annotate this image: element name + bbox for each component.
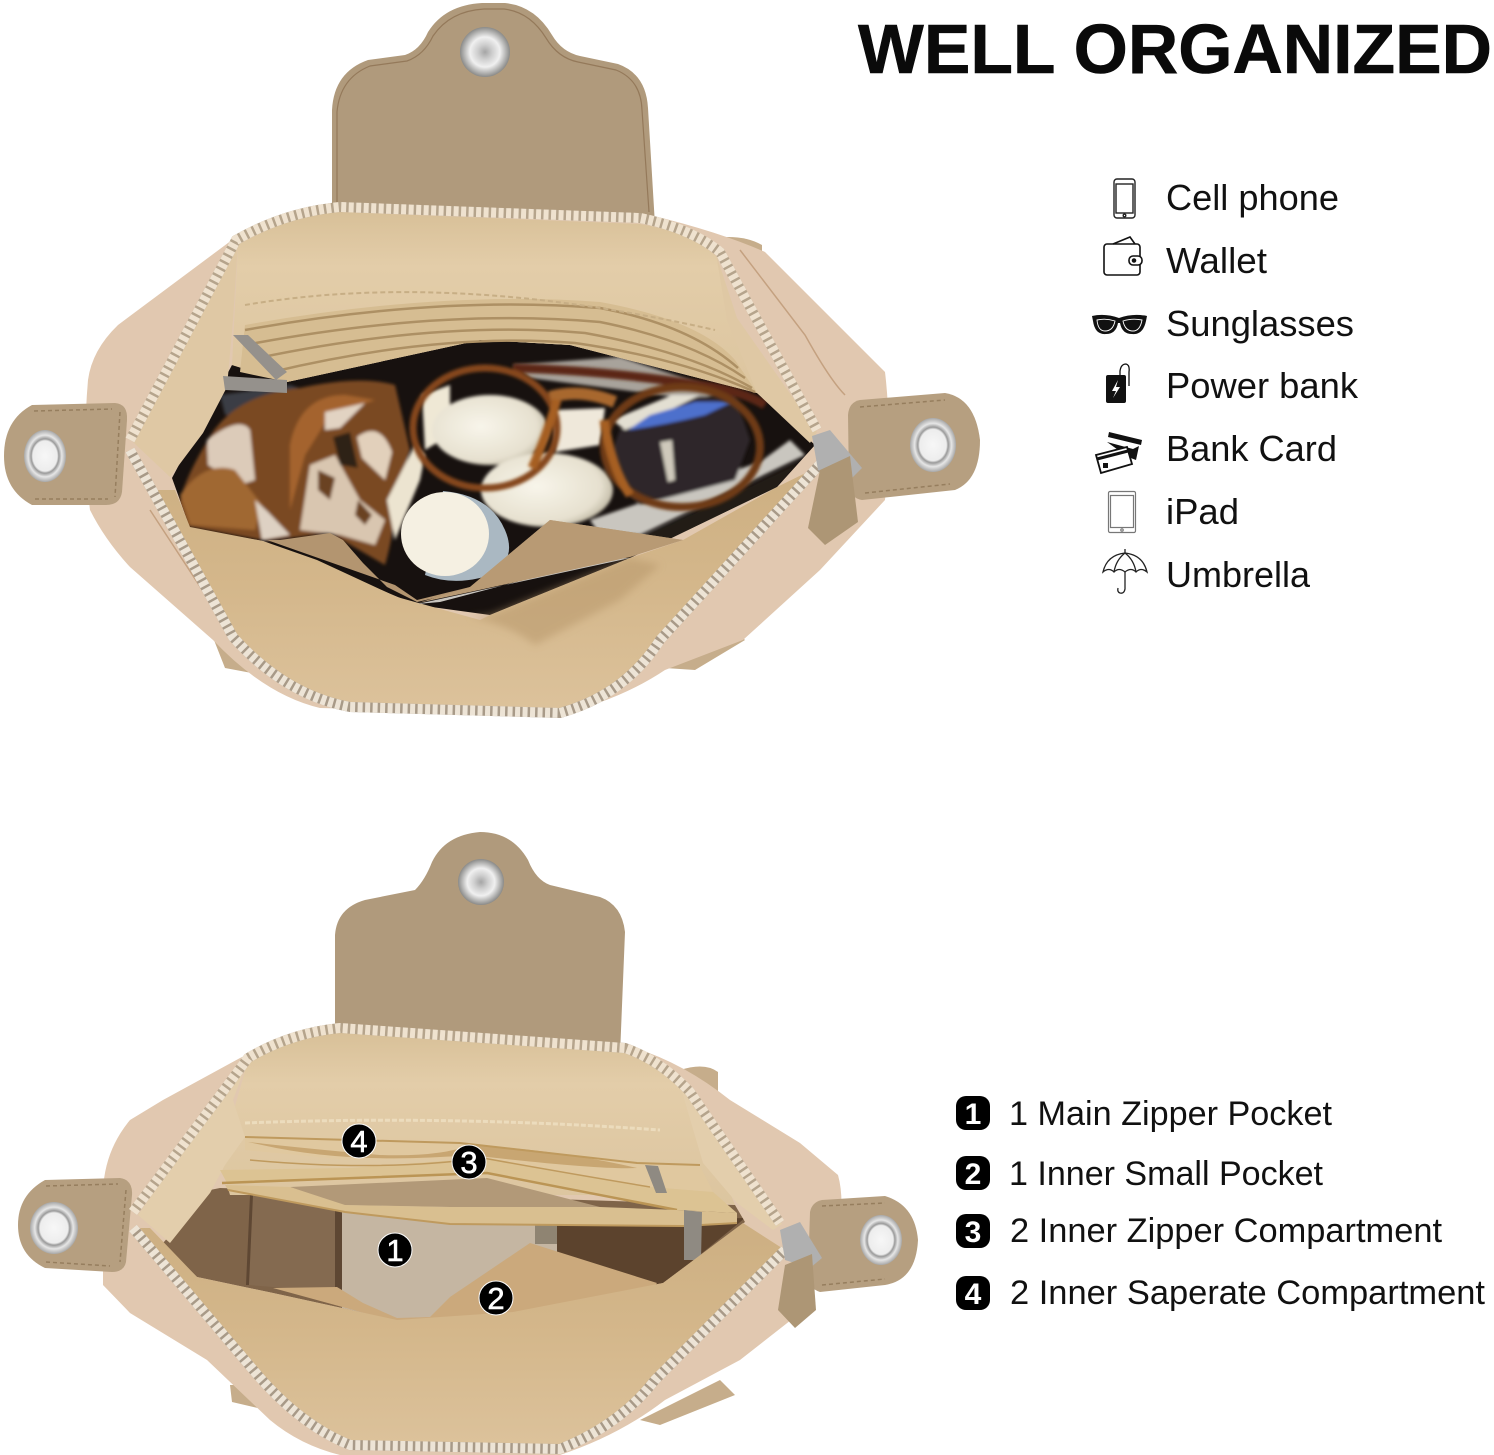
icon: tablet — [1108, 492, 1136, 532]
dark gap line under pocket — [417, 558, 630, 604]
right handle tab — [808, 1196, 918, 1292]
inner slip pocket — [273, 1243, 657, 1322]
main zipper top — [130, 207, 817, 440]
lining zip pullers — [645, 1165, 702, 1260]
main zipper bottom — [130, 450, 822, 713]
left lining fold — [138, 1060, 248, 1243]
stitched seam — [245, 1120, 660, 1130]
packing list — [1092, 177, 1359, 595]
legend row 3: 2 Inner Zipper Compartment — [1010, 1212, 1443, 1250]
zipper pulls, interior — [223, 335, 287, 393]
photo: bag packed with items — [4, 3, 980, 714]
lower inner lining — [140, 1223, 785, 1445]
main zipper slider — [778, 1222, 822, 1328]
bag body — [85, 205, 888, 714]
front zip panel — [225, 1185, 737, 1226]
icon: power bank — [1106, 364, 1129, 403]
item: bank card: Bank Card — [1166, 428, 1337, 469]
right handle tab — [848, 393, 980, 500]
tablet and metal items — [513, 357, 720, 400]
main zipper teeth top — [130, 207, 817, 440]
metal strip — [535, 1226, 557, 1244]
bag flap with snap — [335, 832, 625, 1055]
item: umbrella — [1103, 549, 1311, 595]
main compartment — [163, 1188, 745, 1320]
lining crease shadow — [470, 558, 660, 645]
right lining fold — [716, 254, 817, 443]
legend row 1: 1 — [965, 1098, 981, 1131]
dark lower panel — [290, 1178, 600, 1207]
main zipper teeth bottom — [133, 1228, 785, 1449]
lower inner lining — [150, 465, 822, 708]
item: iPad: iPad — [1166, 491, 1239, 532]
item: umbrella: Umbrella — [1166, 554, 1311, 595]
cream round objects — [387, 445, 425, 540]
item: wallet — [1104, 237, 1267, 281]
item: power bank: Power bank — [1166, 365, 1359, 406]
left wall panels — [248, 1195, 337, 1292]
marker 3 — [452, 1145, 486, 1180]
marker 2 — [479, 1281, 513, 1316]
right wall — [557, 1218, 745, 1285]
bag flap with snap — [332, 3, 655, 225]
icon: phone — [1114, 179, 1135, 218]
legend row 2: 2 — [965, 1158, 981, 1191]
photo: empty bag with numbered compartments — [18, 832, 918, 1455]
compartment contents — [246, 1195, 745, 1330]
main zipper slider — [808, 430, 862, 545]
legend row 4: 2 Inner Saperate Compartment — [1010, 1274, 1486, 1312]
main zipper top — [133, 1028, 780, 1223]
marker 1 — [378, 1233, 412, 1268]
eyeglasses lens view — [605, 395, 750, 505]
upper zip pocket — [245, 1137, 713, 1192]
legend row 2: 1 Inner Small Pocket — [1009, 1155, 1324, 1193]
icon: umbrella — [1103, 549, 1147, 593]
icon: sunglasses — [1092, 315, 1147, 334]
title: WELL ORGANIZED — [858, 10, 1492, 88]
main zipper teeth top — [133, 1028, 780, 1223]
item: sunglasses: Sunglasses — [1166, 303, 1354, 344]
item: bank card — [1096, 428, 1337, 473]
legend row 4: 4 — [965, 1278, 982, 1311]
back strap detail — [680, 1066, 718, 1095]
pale cylinder — [342, 1205, 557, 1330]
legend row 3: 3 — [965, 1216, 981, 1249]
eyeglasses — [413, 368, 765, 507]
marker 4: 4 — [350, 1124, 368, 1159]
item: cell phone: Cell phone — [1166, 177, 1339, 218]
marker 2: 2 — [487, 1281, 505, 1316]
compartment legend — [956, 1095, 1486, 1312]
item: iPad — [1108, 491, 1239, 532]
left handle tab — [18, 1178, 132, 1272]
upper inner lining — [138, 1032, 782, 1243]
icon: wallet — [1104, 237, 1142, 275]
body stitch line — [150, 250, 845, 640]
left lining fold — [133, 242, 238, 477]
silk scarf — [175, 381, 410, 565]
marker 1: 1 — [386, 1233, 404, 1268]
main zipper teeth bottom — [130, 450, 822, 713]
right lining fold — [680, 1085, 782, 1230]
packed items — [175, 357, 805, 565]
legend row 1: 1 Main Zipper Pocket — [1009, 1095, 1333, 1133]
main zipper bottom — [133, 1228, 785, 1449]
contents cavity — [172, 340, 815, 615]
front slip pocket — [267, 520, 683, 602]
back strap detail — [700, 237, 762, 272]
lower strap tabs — [230, 1380, 735, 1425]
marker 3: 3 — [460, 1145, 478, 1180]
bag body — [103, 1027, 842, 1455]
marker 4 — [342, 1124, 376, 1159]
upper inner lining with zip pockets — [133, 212, 817, 477]
white pill — [401, 491, 509, 581]
item: wallet: Wallet — [1166, 240, 1267, 281]
front slip pocket right flap — [418, 520, 683, 603]
lower strap tabs — [212, 625, 745, 675]
icon: bank cards — [1096, 432, 1142, 473]
left handle tab — [4, 403, 127, 505]
